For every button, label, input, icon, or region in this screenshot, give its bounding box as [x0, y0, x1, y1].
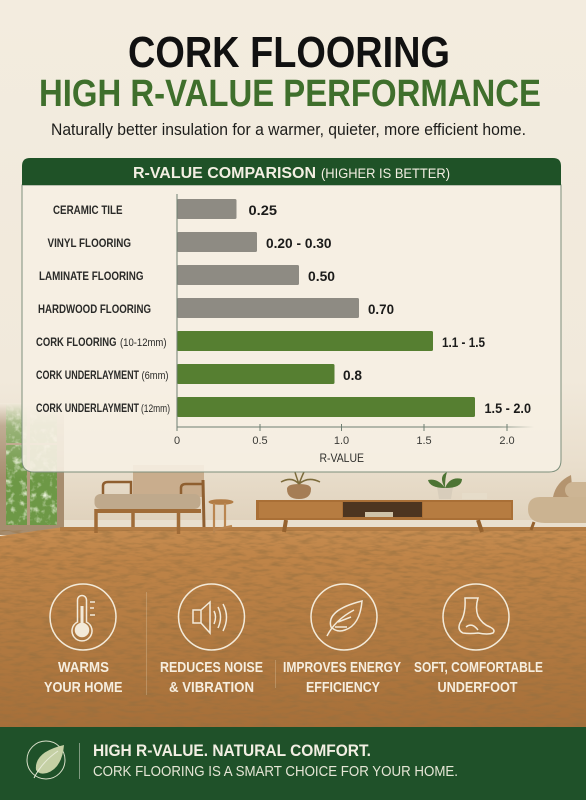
- armchair: [94, 465, 204, 534]
- benefit: warms your home: [44, 584, 122, 696]
- bar: cork flooring: 1.1 - 1.5: [442, 334, 485, 350]
- chart axes: 1.0: [334, 435, 349, 447]
- panel: r-value comparison chart: [22, 158, 561, 472]
- panel header: R-VALUE COMPARISON: [133, 165, 316, 182]
- bar: cork underlayment 12mm: (12mm): [141, 403, 170, 415]
- bar: cork underlayment 6mm: 0.8: [343, 368, 362, 383]
- icon: footer leaf: [27, 741, 65, 779]
- benefit: reduces noise: [160, 584, 263, 696]
- bar: ceramic tile: 0.25: [248, 203, 278, 218]
- bar: laminate flooring: 0.50: [308, 269, 335, 284]
- potted plant left: [281, 472, 320, 499]
- benefit: improves energy: IMPROVES ENERGY: [283, 659, 401, 676]
- cork floor: [0, 527, 586, 727]
- icon: leaf: [311, 584, 377, 650]
- benefit: warms your home: YOUR HOME: [44, 679, 122, 696]
- icon: foot: [443, 584, 509, 650]
- title: CORK FLOORING: [128, 28, 450, 77]
- bar: cork underlayment 12mm: 1.5 - 2.0: [484, 400, 531, 416]
- panel header: (HIGHER IS BETTER): [321, 166, 450, 181]
- bar: cork underlayment 6mm: CORK UNDERLAYMENT: [36, 368, 139, 382]
- footer band: [0, 727, 586, 800]
- bar: laminate flooring: LAMINATE FLOORING: [39, 269, 144, 283]
- bar: hardwood flooring: [38, 298, 394, 318]
- benefit: soft underfoot: UNDERFOOT: [438, 679, 518, 696]
- axis title: R-VALUE: [320, 451, 364, 465]
- tagline: Naturally better insulation for a warmer, quieter, more efficient home.: [51, 121, 526, 139]
- room scene: [0, 403, 586, 727]
- bar: ceramic tile: [53, 199, 278, 219]
- bar: hardwood flooring: HARDWOOD FLOORING: [38, 302, 151, 316]
- background wall: [0, 0, 586, 530]
- panel header: [22, 158, 561, 185]
- benefit: soft underfoot: SOFT, COMFORTABLE: [414, 659, 543, 676]
- side stool: [208, 499, 234, 533]
- window: [0, 403, 64, 535]
- icon: speaker: [178, 584, 244, 650]
- icon: thermometer: [50, 584, 116, 650]
- bar chart: [36, 199, 531, 417]
- bar: vinyl flooring: VINYL FLOORING: [48, 236, 131, 250]
- footer headline: HIGH R-VALUE. NATURAL COMFORT.: [93, 742, 371, 760]
- bar: cork flooring: CORK FLOORING: [36, 335, 116, 349]
- bar: laminate flooring: [39, 265, 335, 285]
- sofa: [528, 475, 586, 530]
- bar: cork underlayment 6mm: [36, 364, 362, 384]
- bar: vinyl flooring: [48, 232, 332, 252]
- chart axes: [174, 194, 534, 465]
- benefit: improves energy: [283, 584, 401, 696]
- benefit: reduces noise: REDUCES NOISE: [160, 659, 263, 676]
- bar: cork underlayment 12mm: [36, 397, 531, 417]
- potted plant right: [428, 472, 462, 499]
- chart axes: 0.5: [252, 435, 268, 447]
- bar: hardwood flooring: 0.70: [368, 302, 394, 317]
- benefit: reduces noise: & VIBRATION: [169, 679, 254, 696]
- stacked books: [462, 493, 487, 499]
- bar: cork flooring: (10-12mm): [120, 337, 166, 349]
- benefit: soft underfoot: [414, 584, 543, 696]
- bar: ceramic tile: CERAMIC TILE: [53, 203, 122, 217]
- bar: vinyl flooring: 0.20 - 0.30: [266, 236, 332, 251]
- bar: cork flooring: [36, 331, 485, 351]
- benefit: warms your home: WARMS: [58, 659, 109, 676]
- panel background: [22, 185, 561, 472]
- chart axes: 0: [174, 435, 180, 447]
- media console: [256, 500, 513, 532]
- footer text: CORK FLOORING IS A SMART CHOICE FOR YOUR HOME.: [93, 763, 458, 780]
- bar: cork underlayment 12mm: CORK UNDERLAYMENT: [36, 401, 139, 415]
- chart axes: 1.5: [416, 435, 432, 447]
- chart axes: 2.0: [499, 435, 515, 447]
- bar: cork underlayment 6mm: (6mm): [142, 370, 168, 382]
- baseboard: [64, 520, 586, 529]
- benefit: improves energy: EFFICIENCY: [306, 679, 380, 696]
